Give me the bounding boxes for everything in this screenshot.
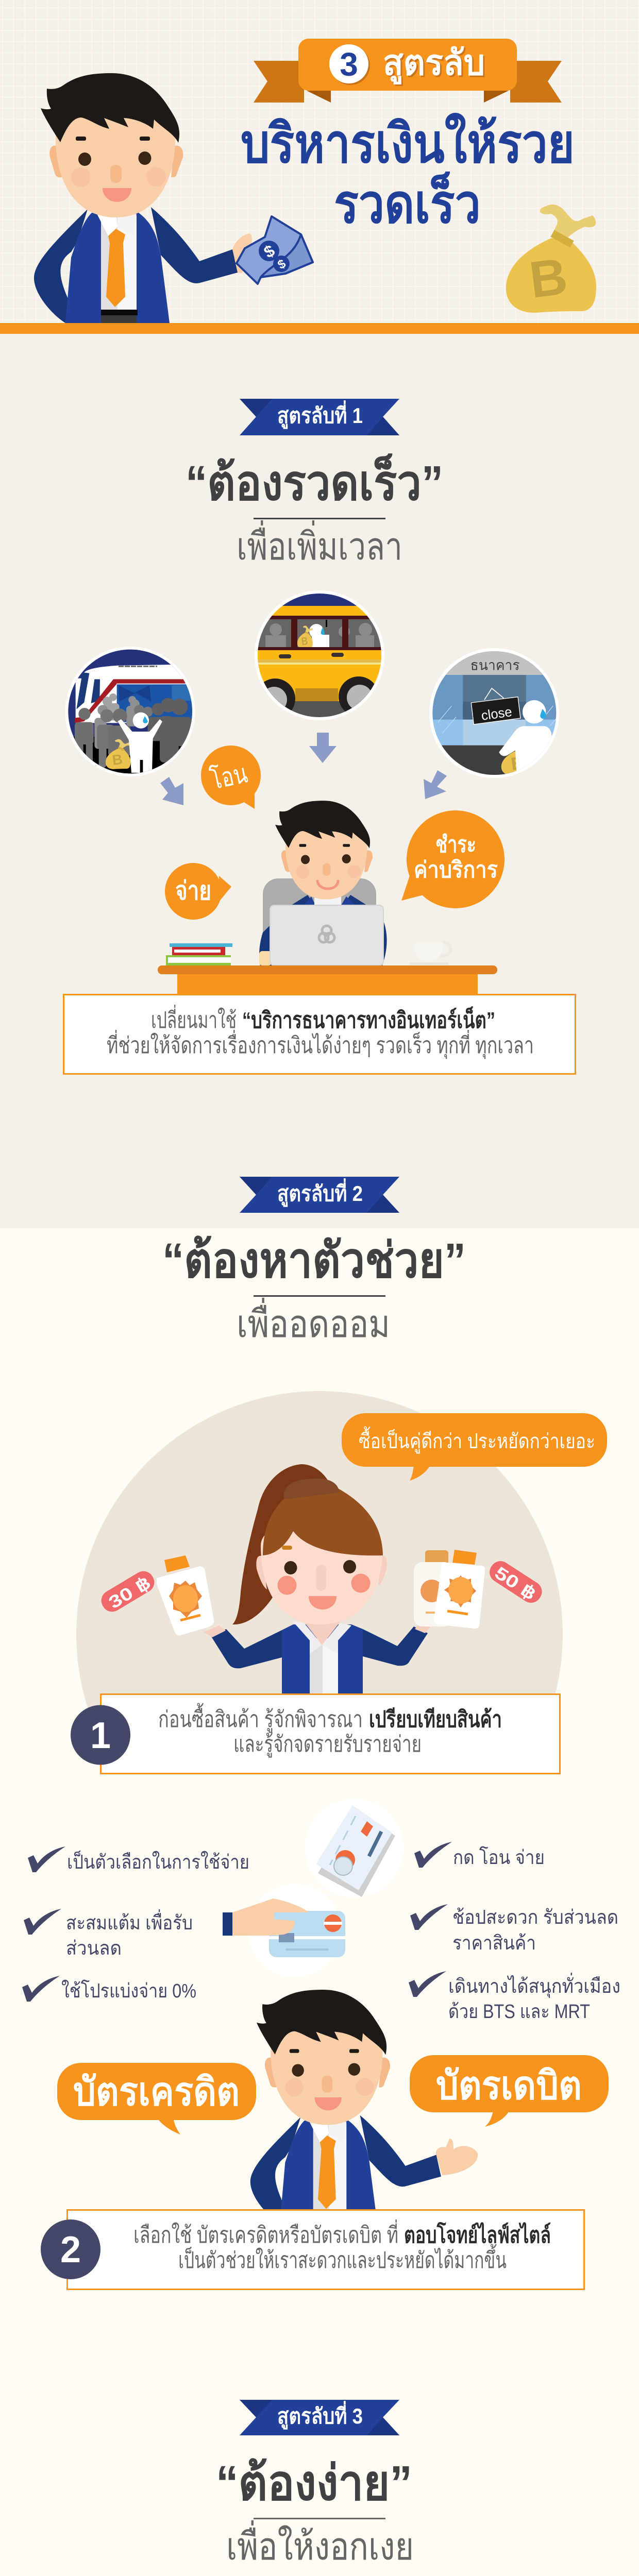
section 2 bbox=[22, 1177, 620, 2290]
debit benefit 2: ช้อปสะดวก รับส่วนลด bbox=[452, 1907, 618, 1928]
arrow: from skytrain bbox=[160, 777, 183, 805]
bubble: pay service fee bbox=[401, 810, 505, 908]
text box 1: compare before buying bbox=[101, 1694, 560, 1773]
arrow: from bus bbox=[309, 733, 337, 763]
text box 2: choose a card that fits your lifestyle bbox=[67, 2210, 584, 2290]
badge: number 2: 2 bbox=[60, 2229, 81, 2270]
main title: รวดเร็ว bbox=[334, 172, 481, 234]
product: 50 baht sunscreen pair bbox=[414, 1550, 546, 1629]
ribbon: tip 1: สูตรลับที่ 1 bbox=[277, 400, 363, 429]
text box 2: choose a card that fits your lifestyle: ตอบโจทย์ไลฟ์สไตล์ bbox=[404, 2221, 551, 2248]
subheading: to save: เพื่ออดออม bbox=[237, 1297, 390, 1345]
illustration: woman comparing products bbox=[204, 1464, 430, 1694]
product: 30 baht sunscreen bbox=[97, 1555, 214, 1635]
subheading: to grow: เพื่อให้งอกเงย bbox=[226, 2520, 414, 2568]
icon: gold money bag bbox=[506, 205, 596, 313]
bubble: buying in pairs saves more: ซื้อเป็นคู่ดีกว่า ประหยัดกว่าเยอะ bbox=[359, 1426, 595, 1453]
illustration: businessman holding money: $ bbox=[275, 257, 289, 272]
ribbon: tip 3: สูตรลับที่ 3 bbox=[277, 2401, 363, 2430]
credit card benefits bbox=[22, 1846, 249, 2002]
bubble: pay service fee: ชำระ bbox=[435, 832, 476, 857]
badge: number 2 bbox=[41, 2219, 100, 2279]
bubble: debit card bbox=[410, 2055, 609, 2127]
orange header rule bbox=[0, 323, 639, 334]
bubble: pay: จ่าย bbox=[175, 876, 211, 905]
badge: number 1: 1 bbox=[90, 1715, 111, 1756]
debit benefit 2: ราคาสินค้า bbox=[452, 1933, 536, 1954]
credit benefit 3 bbox=[22, 1976, 196, 2002]
illustration: bank card tilted bbox=[305, 1799, 403, 1897]
heading: must be easy: “ต้องง่าย” bbox=[216, 2456, 412, 2511]
arrow: from bank bbox=[424, 770, 447, 799]
illustration: businessman choosing a card bbox=[250, 1990, 478, 2224]
header ribbon with title number bbox=[254, 39, 562, 103]
main title: บริหารเงินให้รวย bbox=[241, 113, 575, 174]
debit benefit 1 bbox=[414, 1842, 545, 1869]
bubble: debit card: บัตรเดบิต bbox=[436, 2064, 582, 2108]
text box 1: compare before buying: ก่อนซื้อสินค้า รู้จักพิจารณา bbox=[158, 1703, 363, 1733]
debit card benefits bbox=[409, 1842, 620, 2023]
credit benefit 3: ใช้โปรแบ่งจ่าย 0% bbox=[61, 1979, 196, 2002]
ribbon: tip 1 bbox=[240, 399, 399, 435]
illustration: businessman holding money: $ bbox=[261, 241, 278, 262]
text box 1: compare before buying: และรู้จักจดรายรับรายจ่าย bbox=[233, 1732, 422, 1758]
bubble: credit card bbox=[57, 2063, 256, 2134]
product: 50 baht sunscreen pair: 50 ฿ bbox=[491, 1563, 540, 1604]
text box 1: compare before buying: เปรียบเทียบสินค้า bbox=[369, 1707, 502, 1732]
section 3 bbox=[42, 2400, 621, 2576]
header panel bbox=[34, 39, 596, 323]
header ribbon with title number: 3 bbox=[340, 46, 358, 83]
illustration: man at desk with laptop bbox=[158, 801, 497, 995]
illustration: hand holding card bbox=[223, 1884, 345, 1977]
credit benefit 2 bbox=[24, 1909, 193, 1959]
credit benefit 1: เป็นตัวเลือกในการใช้จ่าย bbox=[67, 1850, 249, 1873]
credit benefit 1 bbox=[28, 1846, 249, 1873]
text box: use internet banking: “บริการธนาคารทางอินเทอร์เน็ต” bbox=[242, 1006, 495, 1033]
text box: use internet banking bbox=[64, 994, 575, 1074]
bubble: buying in pairs saves more bbox=[342, 1413, 607, 1481]
badge: number 1 bbox=[71, 1705, 130, 1765]
text box 2: choose a card that fits your lifestyle: เป็นตัวช่วยให้เราสะดวกและประหยัดได้มากขึ้น bbox=[178, 2244, 507, 2273]
bubble: transfer: โอน bbox=[208, 758, 250, 795]
section 1 bbox=[62, 399, 575, 1074]
heading: must find a helper: “ต้องหาตัวช่วย” bbox=[162, 1233, 466, 1288]
product: 30 baht sunscreen: 30 ฿ bbox=[105, 1572, 154, 1613]
bubble: pay service fee: ค่าบริการ bbox=[414, 857, 498, 883]
debit benefit 3: เดินทางได้สนุกทั่วเมือง bbox=[448, 1973, 620, 1998]
background circle bbox=[76, 1391, 563, 1708]
debit benefit 3: ด้วย BTS และ MRT bbox=[448, 2001, 590, 2023]
subheading: to gain time: เพื่อเพิ่มเวลา bbox=[237, 520, 402, 568]
main title bbox=[241, 113, 575, 234]
scene: school bus bbox=[253, 590, 386, 722]
credit benefit 2: สะสมแต้ม เพื่อรับ bbox=[66, 1909, 193, 1934]
ribbon: tip 3 bbox=[240, 2400, 399, 2435]
text box: use internet banking: เปลี่ยนมาใช้ bbox=[151, 1004, 237, 1033]
debit benefit 3 bbox=[409, 1971, 620, 2023]
scene: closed bank: close bbox=[480, 704, 513, 723]
scene: closed bank bbox=[429, 648, 559, 778]
illustration: businessman holding money bbox=[34, 73, 313, 323]
ribbon: tip 2: สูตรลับที่ 2 bbox=[277, 1178, 363, 1207]
text box 2: choose a card that fits your lifestyle: เลือกใช้ บัตรเครดิตหรือบัตรเดบิต ที่ bbox=[133, 2219, 398, 2248]
ribbon: tip 2 bbox=[240, 1177, 399, 1213]
bubble: transfer bbox=[201, 745, 261, 809]
bubble: pay bbox=[165, 863, 231, 920]
scene: crowded skytrain bbox=[65, 647, 195, 776]
debit benefit 2 bbox=[410, 1904, 618, 1954]
credit benefit 2: ส่วนลด bbox=[66, 1938, 122, 1959]
heading: must be fast: “ต้องรวดเร็ว” bbox=[186, 453, 443, 511]
header ribbon with title number: สูตรลับ bbox=[383, 43, 485, 85]
debit benefit 1: กด โอน จ่าย bbox=[453, 1846, 545, 1869]
scene: closed bank: ธนาคาร bbox=[470, 657, 520, 673]
bubble: credit card: บัตรเครดิต bbox=[73, 2070, 240, 2114]
